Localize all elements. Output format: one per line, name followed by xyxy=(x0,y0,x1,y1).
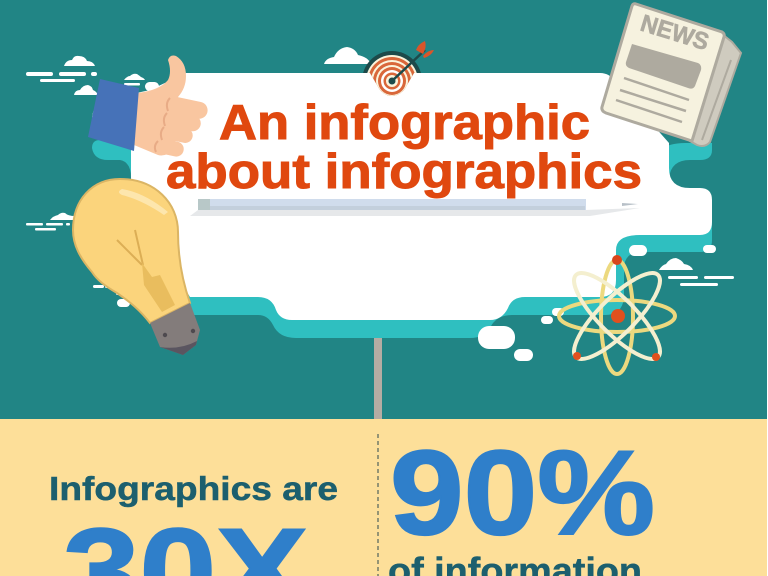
column divider xyxy=(377,434,379,576)
title: An infographic xyxy=(219,96,590,150)
icon: atom xyxy=(559,255,675,374)
title: about infographics xyxy=(166,145,642,199)
sign board upper right shadow xyxy=(660,143,712,180)
icon: newspaper xyxy=(602,4,741,146)
panel: yellow stats background xyxy=(0,419,767,576)
sign board shadow xyxy=(92,140,712,338)
stat label: infographics are: Infographics are xyxy=(49,470,338,507)
icon: newspaper: NEWS xyxy=(637,10,712,56)
icon: thumbs up hand xyxy=(88,56,209,158)
sign board xyxy=(92,73,712,320)
cloud and speed line decorations xyxy=(26,47,734,361)
icon: pencil underline xyxy=(190,199,640,216)
stat number: 90%: 90% xyxy=(390,426,655,560)
panel: teal header background xyxy=(0,0,767,420)
signpost pole xyxy=(374,335,382,419)
icon: target with arrow xyxy=(363,41,434,96)
title xyxy=(166,96,642,199)
icon: light bulb xyxy=(73,179,200,355)
